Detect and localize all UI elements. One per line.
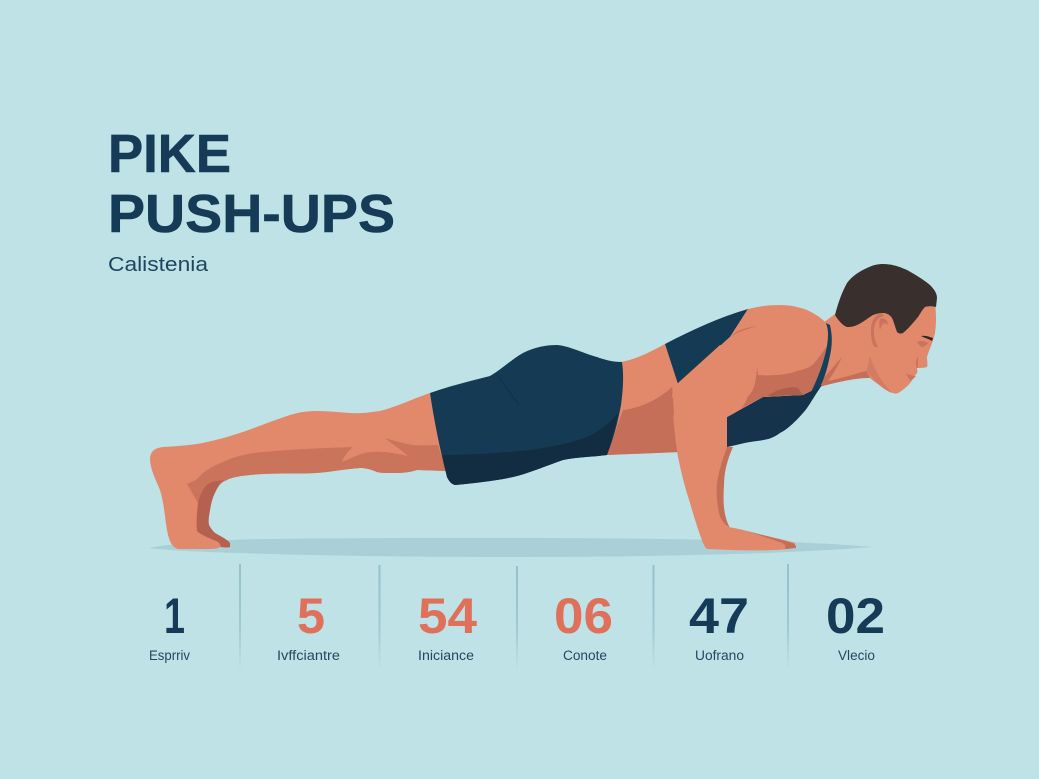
stat 2	[277, 588, 340, 663]
divider 3	[516, 566, 518, 670]
stat 5: 47	[689, 588, 749, 644]
title	[108, 124, 395, 244]
leg	[150, 393, 446, 549]
jaw line shading	[866, 356, 892, 393]
stat 4: 06	[554, 588, 613, 644]
ear	[871, 313, 891, 347]
stat 2: 5	[297, 588, 325, 644]
neck shading	[815, 357, 870, 388]
floor shadow	[149, 538, 872, 557]
stat 3: 54	[418, 588, 477, 644]
neck and head	[815, 264, 937, 394]
title: PIKE	[108, 124, 231, 184]
divider 4	[652, 565, 654, 670]
stat 6: 02	[826, 588, 885, 644]
stat 5	[689, 588, 749, 663]
hair	[835, 264, 937, 334]
shorts	[430, 345, 623, 485]
stat 1	[149, 588, 190, 663]
stat 5: Uofrano	[695, 648, 744, 663]
stat 2: Ivffciantre	[277, 648, 340, 663]
chest and shoulder	[678, 305, 829, 430]
arm	[671, 345, 796, 550]
tank top	[665, 309, 822, 447]
nose and lips shade	[906, 356, 918, 381]
divider 1	[239, 564, 241, 670]
figure: athlete in plank	[150, 264, 937, 550]
torso	[607, 344, 680, 455]
stat 1: 1	[164, 588, 185, 644]
stat 1: Esprriv	[149, 648, 190, 663]
title: PUSH-UPS	[108, 184, 395, 244]
eye and brow	[921, 336, 933, 341]
stat 3: Iniciance	[418, 648, 474, 663]
stat 4: Conote	[563, 648, 607, 663]
stat 6: Vlecio	[838, 648, 875, 663]
divider 2	[378, 565, 380, 670]
divider 5	[787, 564, 789, 670]
tank strap	[811, 323, 832, 392]
subtitle: Calistenia	[108, 253, 209, 276]
